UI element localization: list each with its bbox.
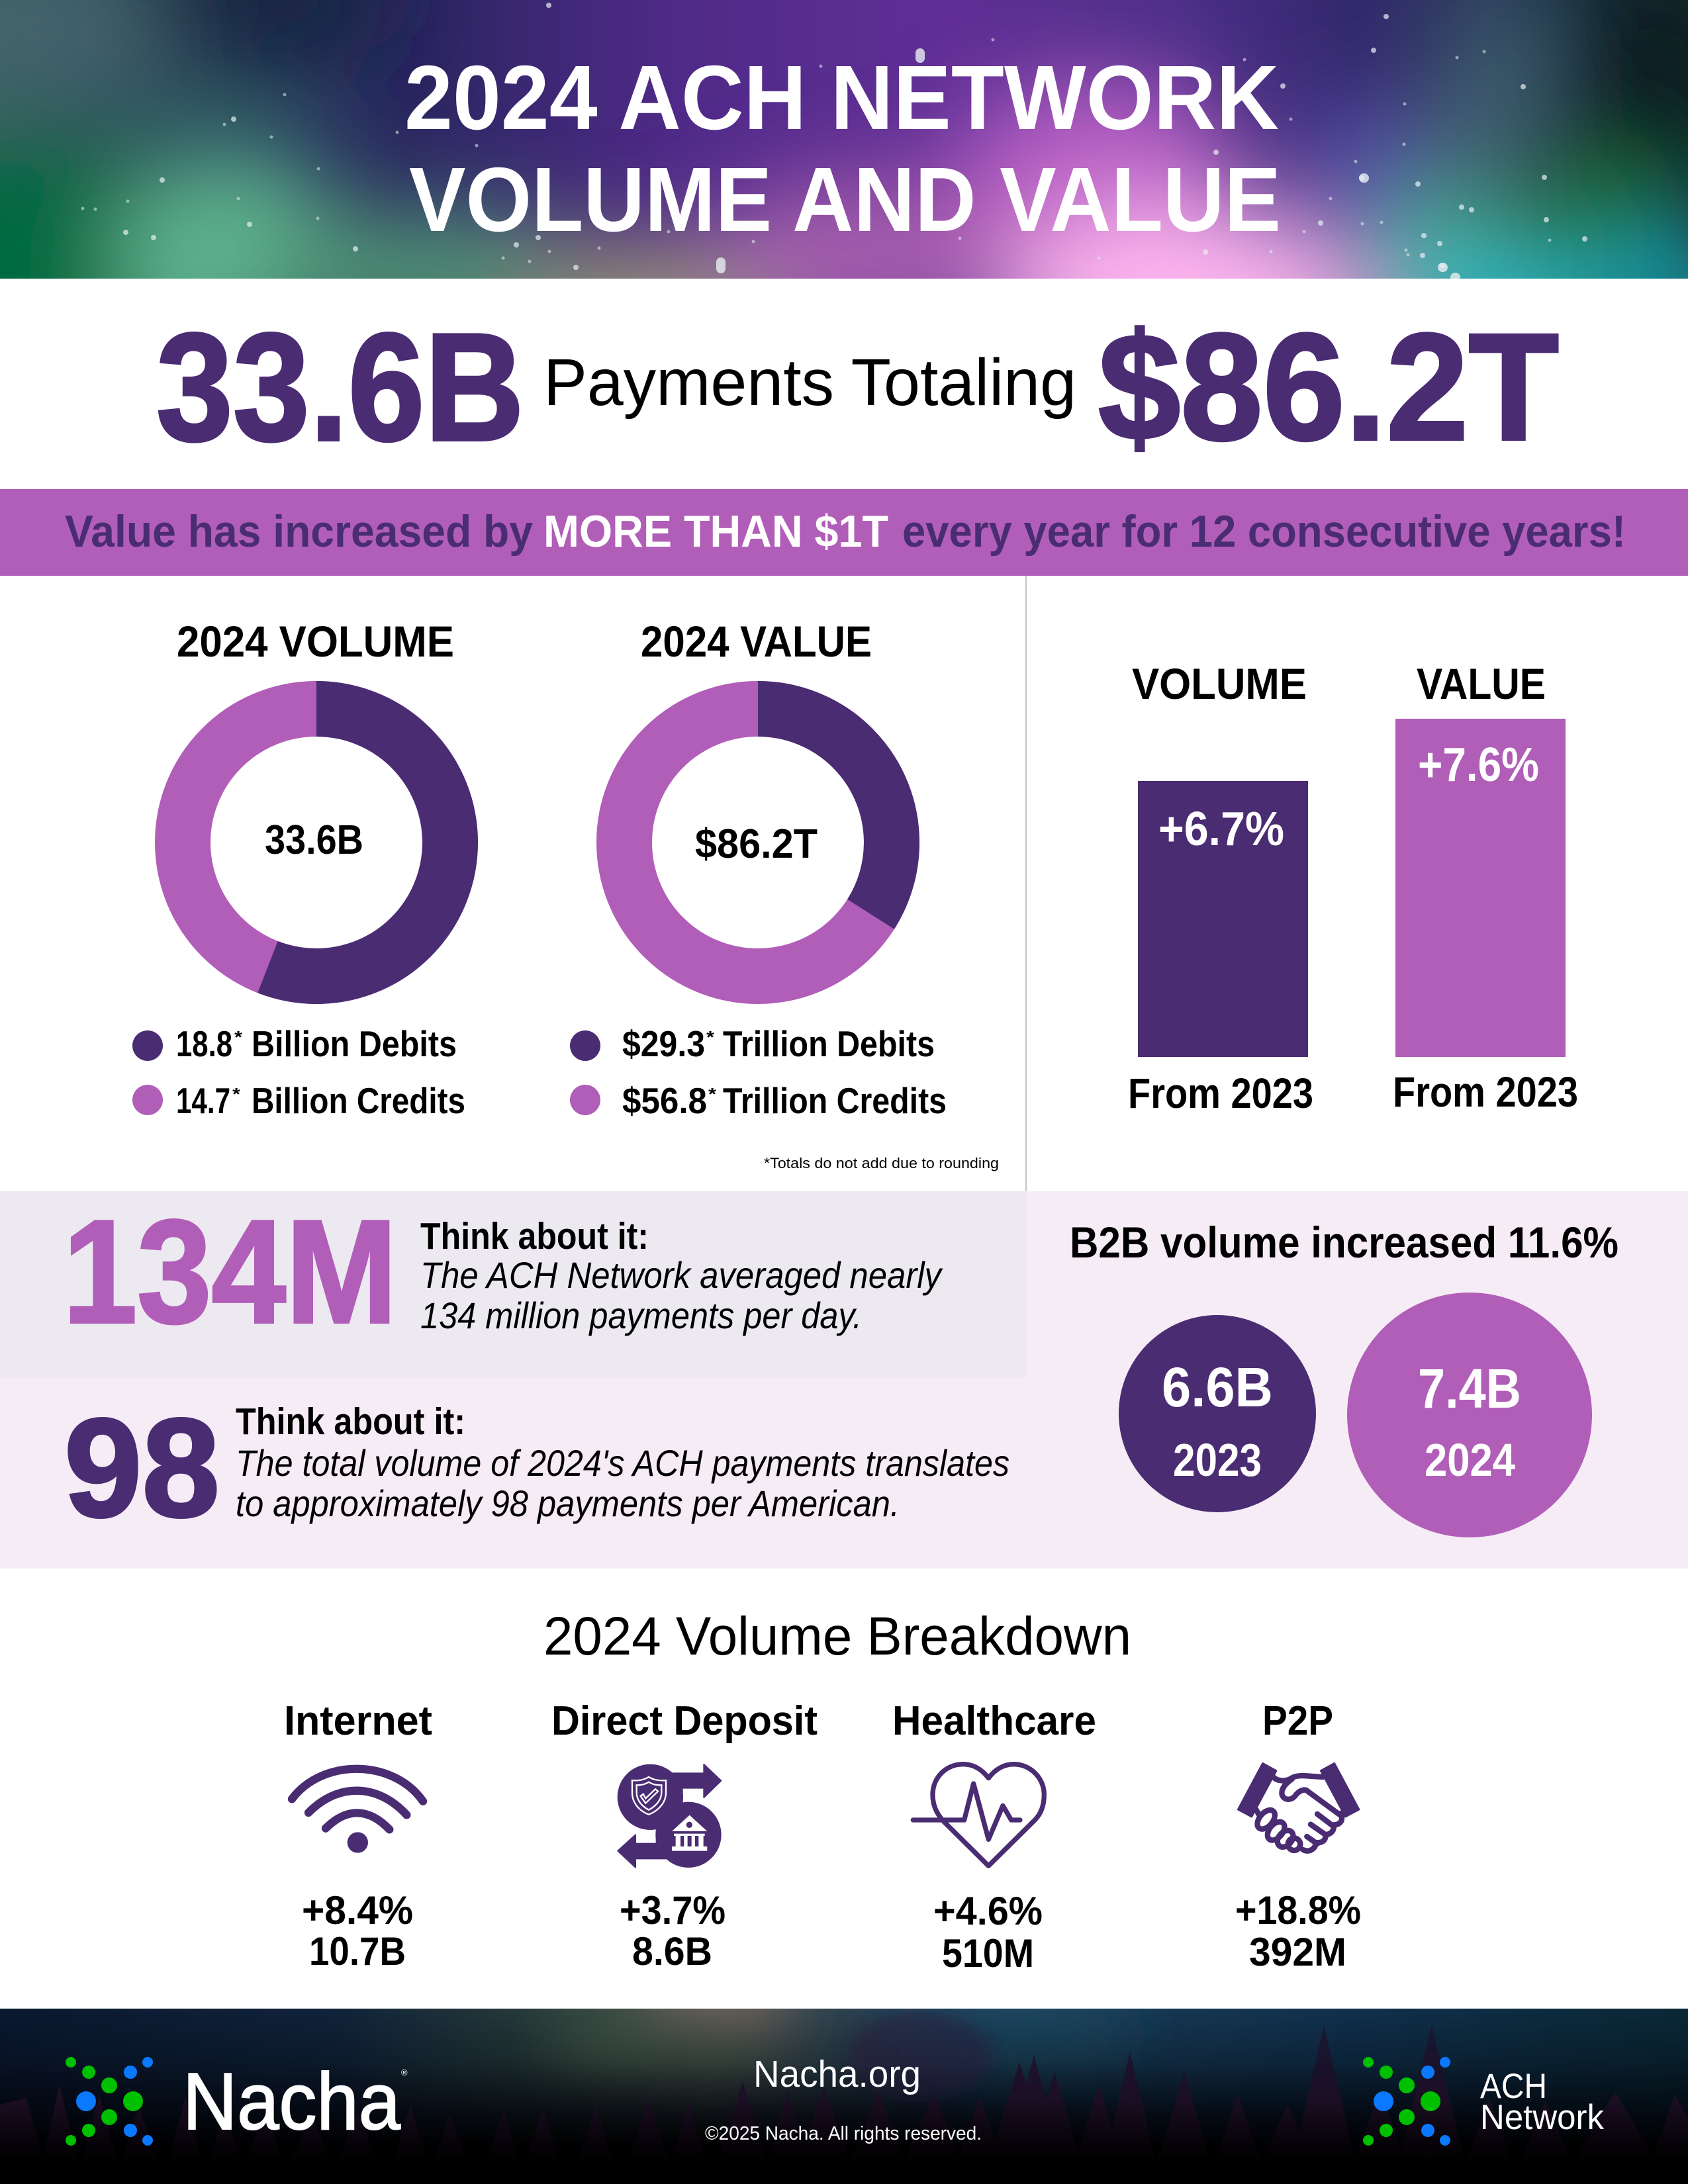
panel: 2024 volume donut xyxy=(132,617,465,1121)
trees silhouette xyxy=(0,2026,1688,2139)
legend: value credits xyxy=(570,1080,947,1121)
panel: 134M per day: The ACH Network averaged nearly xyxy=(420,1254,943,1296)
legend: volume credits: * xyxy=(232,1084,241,1104)
icon: handshake xyxy=(1239,1764,1359,1851)
item: P2P xyxy=(1235,1698,1361,1974)
legend: value debits: $29.3 xyxy=(622,1023,705,1064)
panel: 134M per day xyxy=(0,1190,1026,1378)
bar: value: From 2023 xyxy=(1393,1068,1578,1116)
item: healthcare: 510M xyxy=(942,1931,1034,1976)
logo: ACH Network: Network xyxy=(1480,2098,1604,2137)
headline totals: 33.6B xyxy=(156,302,524,473)
circle: 2024 xyxy=(1347,1293,1592,1537)
legend: value credits: * xyxy=(708,1084,717,1104)
panel: 98 per American: 98 xyxy=(64,1389,220,1546)
legend: value credits: Trillion Credits xyxy=(723,1080,947,1121)
legend: volume credits: 14.7 xyxy=(176,1080,230,1121)
logo: ACH Network xyxy=(1363,2057,1604,2146)
legend: volume credits xyxy=(132,1080,465,1121)
heading: volume breakdown: 2024 Volume Breakdown xyxy=(543,1606,1131,1666)
logo: Nacha xyxy=(66,2056,408,2146)
donut chart: value: $86.2T xyxy=(695,821,818,867)
title xyxy=(404,47,1281,251)
bar: value xyxy=(1393,659,1578,1116)
item: healthcare: +4.6% xyxy=(933,1889,1043,1933)
panel: B2B volume xyxy=(1026,1191,1688,1569)
tree canopy xyxy=(847,2012,993,2098)
item: internet: 10.7B xyxy=(309,1929,406,1974)
panel: 98 per American xyxy=(0,1378,1026,1569)
website: Nacha.org xyxy=(753,2053,921,2095)
circle: 2024: 7.4B xyxy=(1418,1357,1521,1420)
bar: volume: +6.7% xyxy=(1158,803,1284,856)
item: direct deposit: +3.7% xyxy=(620,1888,726,1933)
donut chart: volume: 33.6B xyxy=(265,817,363,863)
panel: 134M per day: Think about it: xyxy=(420,1215,649,1257)
legend: value debits: * xyxy=(706,1027,715,1047)
legend: volume debits: Billion Debits xyxy=(252,1023,457,1064)
logo: Nacha: ® xyxy=(401,2068,408,2077)
heading: 2024 volume: 2024 VOLUME xyxy=(177,617,454,666)
panel: B2B volume: B2B volume increased 11.6% xyxy=(1070,1218,1618,1267)
item: healthcare: Healthcare xyxy=(892,1698,1096,1744)
legend: volume debits: 18.8 xyxy=(176,1023,232,1064)
legend: volume debits: * xyxy=(234,1027,243,1047)
item: P2P: +18.8% xyxy=(1235,1888,1361,1933)
item: P2P: P2P xyxy=(1262,1698,1333,1744)
panel: 134M per day: 134M xyxy=(63,1190,397,1354)
item: P2P: 392M xyxy=(1249,1930,1346,1974)
icon: heart with pulse xyxy=(913,1764,1044,1866)
item: internet: +8.4% xyxy=(302,1888,413,1933)
legend: value credits: $56.8 xyxy=(622,1080,707,1121)
panel: 98 per American: to approximately 98 payments per American. xyxy=(236,1482,900,1524)
footer xyxy=(0,2009,1688,2184)
panel: 98 per American: Think about it: xyxy=(236,1400,465,1443)
copyright: ©2025 Nacha. All rights reserved. xyxy=(705,2123,982,2144)
circle: 2023: 2023 xyxy=(1173,1434,1262,1486)
logo: Nacha: Nacha xyxy=(183,2056,400,2146)
bar: volume xyxy=(1128,659,1313,1117)
footnote: *Totals do not add due to rounding xyxy=(764,1155,999,1171)
item: direct deposit: 8.6B xyxy=(632,1929,712,1974)
heading: 2024 value: 2024 VALUE xyxy=(641,617,872,666)
legend: volume debits xyxy=(132,1023,457,1064)
item: internet: Internet xyxy=(284,1698,432,1744)
banner: value increase: MORE THAN $1T xyxy=(543,506,888,557)
icon: wifi xyxy=(292,1769,423,1853)
headline totals: Payments Totaling xyxy=(543,345,1076,420)
title: 2024 ACH NETWORK xyxy=(404,47,1279,149)
headline totals xyxy=(156,302,1559,473)
item: internet xyxy=(284,1698,432,1974)
circle: 2023: 6.6B xyxy=(1162,1356,1273,1418)
banner: value increase: Value has increased by xyxy=(65,506,533,557)
donut chart: value xyxy=(624,709,892,976)
circle: 2024: 2024 xyxy=(1425,1434,1515,1486)
circle: 2023 xyxy=(1119,1315,1316,1512)
donut chart: volume xyxy=(183,709,450,976)
bar: volume: VOLUME xyxy=(1132,659,1307,708)
bar: volume: From 2023 xyxy=(1128,1069,1313,1117)
legend: value debits xyxy=(570,1023,935,1064)
header banner: aurora sky xyxy=(0,0,1688,404)
title: VOLUME AND VALUE xyxy=(409,149,1281,251)
panel: 2024 value donut xyxy=(570,617,947,1121)
panel: 134M per day: 134 million payments per day. xyxy=(420,1295,862,1336)
bar chart: year over year growth xyxy=(1128,659,1578,1117)
stars xyxy=(83,5,1585,277)
icon: direct deposit xyxy=(618,1764,722,1868)
banner: value increase xyxy=(0,489,1688,576)
panel: 98 per American: The total volume of 2024's ACH payments translates xyxy=(236,1442,1009,1484)
item: healthcare xyxy=(892,1698,1096,1976)
headline totals: $86.2T xyxy=(1098,302,1559,472)
banner: value increase: every year for 12 consecutive years! xyxy=(902,506,1626,557)
item: direct deposit xyxy=(551,1698,818,1974)
legend: volume credits: Billion Credits xyxy=(252,1080,465,1121)
bar: value: VALUE xyxy=(1417,659,1546,708)
logo: ACH Network: ACH xyxy=(1480,2067,1547,2106)
legend: value debits: Trillion Debits xyxy=(723,1023,935,1064)
divider xyxy=(1025,576,1027,1191)
item: direct deposit: Direct Deposit xyxy=(551,1698,818,1744)
bar: value: +7.6% xyxy=(1418,739,1539,792)
